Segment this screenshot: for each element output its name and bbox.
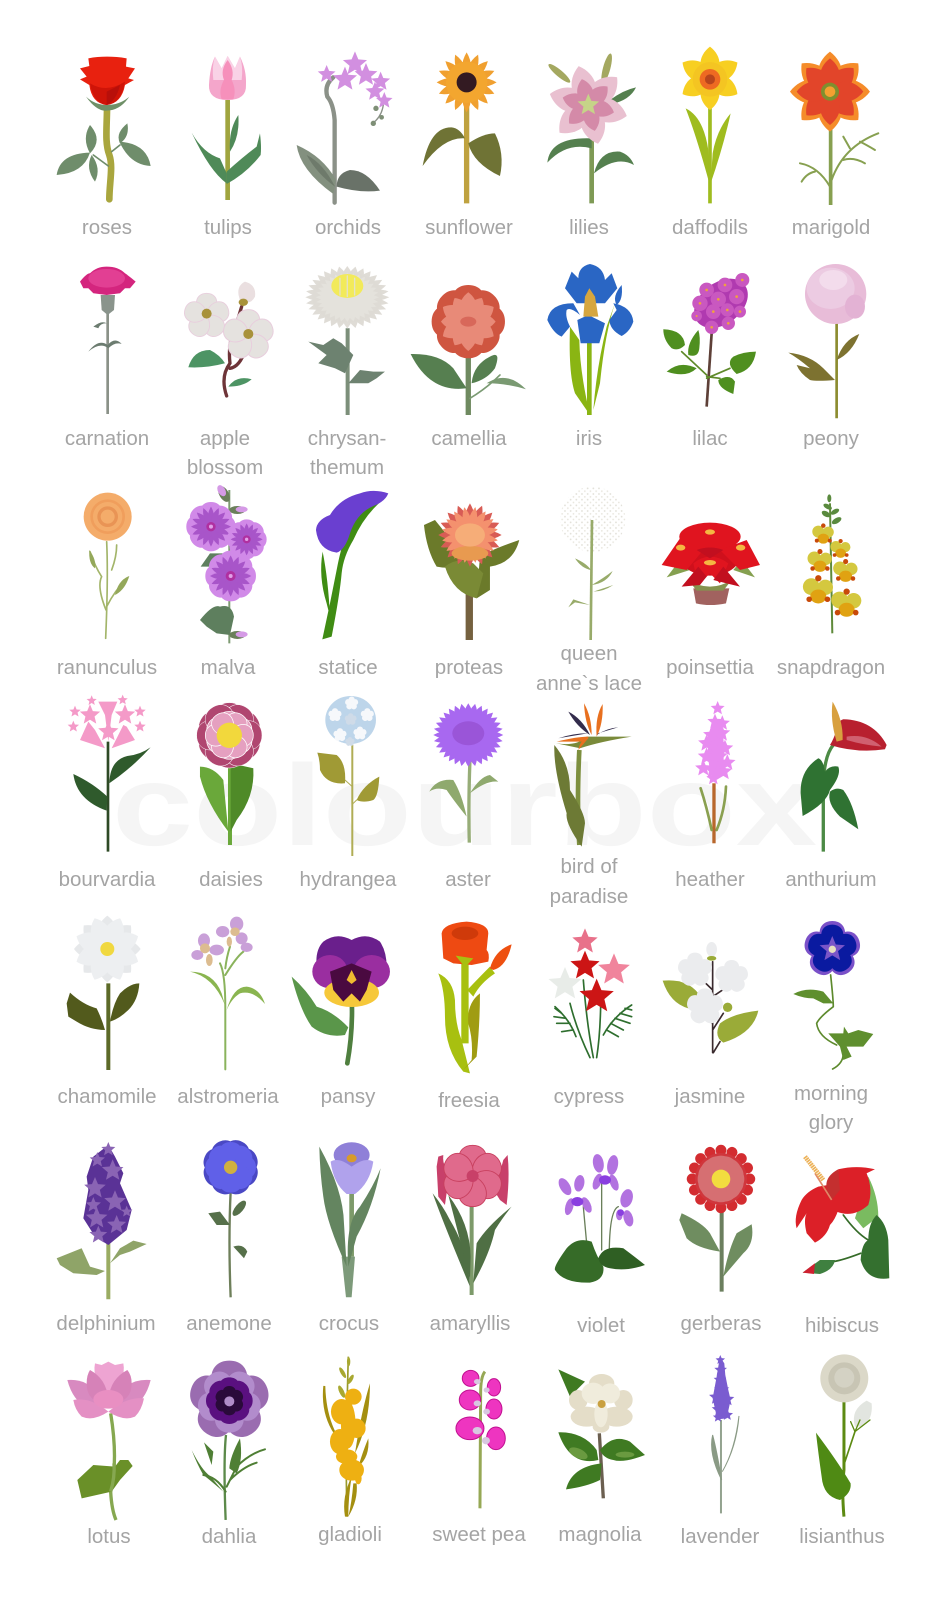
label: gladioli: gladioli [318, 1523, 382, 1546]
label: lilies: lilies [569, 216, 609, 239]
icon: pansy [292, 936, 390, 1063]
label: pansy: pansy [321, 1085, 376, 1108]
icon: lavender [709, 1355, 739, 1513]
label: malva: malva [201, 656, 256, 679]
panel: ranunculus [57, 493, 157, 679]
icon: statice [316, 491, 388, 639]
panel: delphinium [56, 1142, 156, 1335]
label: violet: violet [577, 1314, 625, 1337]
watermark: colourbox [112, 741, 817, 870]
panel: dahlia [181, 1354, 276, 1548]
panel: bird of paradise: paradise [550, 885, 628, 908]
panel: hibiscus [796, 1157, 889, 1337]
label: amaryllis: amaryllis [430, 1312, 510, 1335]
icon: apple blossom [182, 282, 276, 396]
panel: cypress [549, 928, 632, 1108]
icon: daffodils [678, 47, 742, 203]
panel: lotus [67, 1362, 151, 1548]
panel: iris [547, 264, 633, 450]
icon: dahlia [181, 1354, 276, 1520]
label: orchids: orchids [315, 216, 381, 239]
panel: malva [185, 484, 268, 679]
icon: violet [555, 1153, 645, 1283]
panel: lilac [663, 269, 757, 450]
icon: heather [695, 701, 736, 843]
label: iris: iris [576, 427, 602, 450]
panel: chamomile [57, 905, 157, 1108]
panel: tulips [192, 56, 261, 239]
label: camellia: camellia [431, 427, 507, 450]
panel: alstromeria [177, 917, 279, 1108]
icon: delphinium [57, 1142, 147, 1299]
icon: lisianthus [816, 1354, 872, 1517]
icon: orchids [297, 51, 393, 203]
label: daffodils: daffodils [672, 216, 748, 239]
icon: chrysanthemum [283, 249, 412, 415]
label: alstromeria: alstromeria [177, 1085, 279, 1108]
label: crocus: crocus [319, 1312, 379, 1335]
panel: sunflower [423, 43, 513, 239]
label: tulips: tulips [204, 216, 252, 239]
panel: apple blossom [182, 282, 276, 479]
panel: proteas [424, 492, 519, 679]
panel: chrysanthemum: themum [310, 456, 384, 479]
panel: orchids [297, 51, 393, 239]
label: hydrangea: hydrangea [300, 868, 397, 891]
icon: chamomile [64, 905, 151, 1070]
label: daisies: daisies [199, 868, 263, 891]
panel: violet [555, 1153, 645, 1337]
label: morning glory: morning [794, 1082, 868, 1105]
icon: amaryllis [433, 1145, 512, 1295]
label: lilac: lilac [692, 427, 728, 450]
label: ranunculus: ranunculus [57, 656, 157, 679]
panel: anthurium [785, 702, 887, 891]
icon: freesia [438, 922, 512, 1073]
icon: carnation [80, 267, 136, 414]
panel: statice [316, 491, 388, 679]
icon: morning glory [793, 921, 873, 1069]
panel: camellia [411, 284, 526, 450]
panel: gladioli [318, 1357, 382, 1546]
panel: apple blossom: blossom [187, 456, 263, 479]
label: snapdragon: snapdragon [777, 656, 885, 679]
label: aster: aster [445, 868, 491, 891]
panel: queen anne's lace [536, 487, 642, 695]
icon: hydrangea [317, 696, 379, 856]
icon: queen anne's lace [560, 487, 625, 640]
icon: hibiscus [796, 1157, 889, 1279]
panel: morning glory [793, 921, 873, 1134]
label: lotus: lotus [87, 1525, 131, 1548]
panel: crocus [319, 1142, 381, 1335]
label: magnolia: magnolia [558, 1523, 642, 1546]
panel: snapdragon [777, 494, 885, 679]
panel: anemone [186, 1130, 272, 1335]
panel: bird of paradise [550, 703, 632, 908]
label: anemone: anemone [186, 1312, 272, 1335]
icon: peony [788, 264, 866, 418]
panel: sweet pea [432, 1370, 526, 1546]
icon: bird of paradise [554, 703, 632, 847]
panel: aster [415, 686, 522, 891]
icon: lilac [663, 269, 757, 407]
label: lavender: lavender [681, 1525, 759, 1548]
panel: daffodils [672, 47, 748, 239]
icon: iris [547, 264, 633, 415]
panel: gerberas [676, 1134, 766, 1335]
icon: jasmine [663, 942, 758, 1053]
label: roses: roses [82, 216, 132, 239]
icon: alstromeria [190, 917, 265, 1069]
panel: bourvardia [59, 695, 156, 891]
panel: chrysanthemum [283, 249, 412, 479]
panel: magnolia [558, 1369, 645, 1546]
icon: tulips [192, 56, 261, 200]
icon: ranunculus [84, 493, 132, 638]
panel: freesia [438, 922, 512, 1112]
label: lisianthus: lisianthus [799, 1525, 885, 1548]
icon: gerberas [676, 1134, 766, 1292]
icon: crocus [319, 1142, 381, 1297]
panel: roses [57, 57, 151, 239]
label: anthurium: anthurium [785, 868, 877, 891]
label: dahlia: dahlia [202, 1525, 257, 1548]
panel: heather [675, 701, 745, 891]
label: chrysanthemum: chrysan- [308, 427, 386, 450]
icon: camellia [411, 284, 526, 415]
label: delphinium: delphinium [56, 1312, 156, 1335]
panel: morning glory: glory [809, 1111, 854, 1134]
icon: anthurium [801, 702, 887, 852]
label: peony: peony [803, 427, 860, 450]
panel: queen anne's lace: anne`s lace [536, 672, 642, 695]
label: sunflower: sunflower [425, 216, 513, 239]
panel: hydrangea [300, 696, 397, 891]
label: chamomile: chamomile [57, 1085, 157, 1108]
icon: sunflower [423, 43, 506, 203]
panel: lavender [681, 1355, 759, 1548]
icon: sweet pea [456, 1370, 505, 1508]
icon: marigold [790, 52, 878, 205]
icon: bourvardia [68, 695, 151, 852]
panel: marigold [790, 52, 878, 239]
icon: cypress [549, 928, 632, 1058]
label: sweet pea: sweet pea [432, 1523, 526, 1546]
label: proteas: proteas [435, 656, 503, 679]
icon: poinsettia [662, 523, 760, 605]
label: hibiscus: hibiscus [805, 1314, 879, 1337]
panel: poinsettia [662, 523, 760, 679]
panel: pansy [292, 936, 390, 1108]
label: freesia: freesia [438, 1089, 500, 1112]
label: cypress: cypress [554, 1085, 624, 1108]
icon: daisies [182, 689, 277, 845]
icon: roses [57, 57, 151, 199]
label: bird of paradise: bird of [561, 855, 618, 878]
icon: anemone [193, 1130, 268, 1297]
label: statice: statice [318, 656, 378, 679]
icon: aster [415, 686, 522, 843]
panel: daisies [182, 689, 277, 891]
icon: lotus [67, 1362, 151, 1520]
label: queen anne's lace: queen [560, 642, 618, 665]
icon: malva [185, 484, 268, 643]
panel: jasmine [663, 942, 758, 1108]
panel: amaryllis [430, 1145, 512, 1335]
label: bourvardia: bourvardia [59, 868, 156, 891]
label: heather: heather [675, 868, 745, 891]
label: marigold: marigold [792, 216, 870, 239]
icon: gladioli [324, 1357, 370, 1517]
icon: lilies [539, 53, 637, 203]
icon: snapdragon [803, 494, 861, 633]
panel: peony [788, 264, 866, 450]
label: apple blossom: apple [200, 427, 250, 450]
label: jasmine: jasmine [674, 1085, 745, 1108]
panel: lisianthus [799, 1354, 885, 1548]
panel: lilies [539, 53, 637, 239]
icon: proteas [424, 492, 519, 640]
panel: carnation [65, 267, 149, 450]
label: gerberas: gerberas [681, 1312, 761, 1335]
label: poinsettia: poinsettia [666, 656, 754, 679]
label: carnation: carnation [65, 427, 149, 450]
icon: magnolia [558, 1369, 645, 1498]
